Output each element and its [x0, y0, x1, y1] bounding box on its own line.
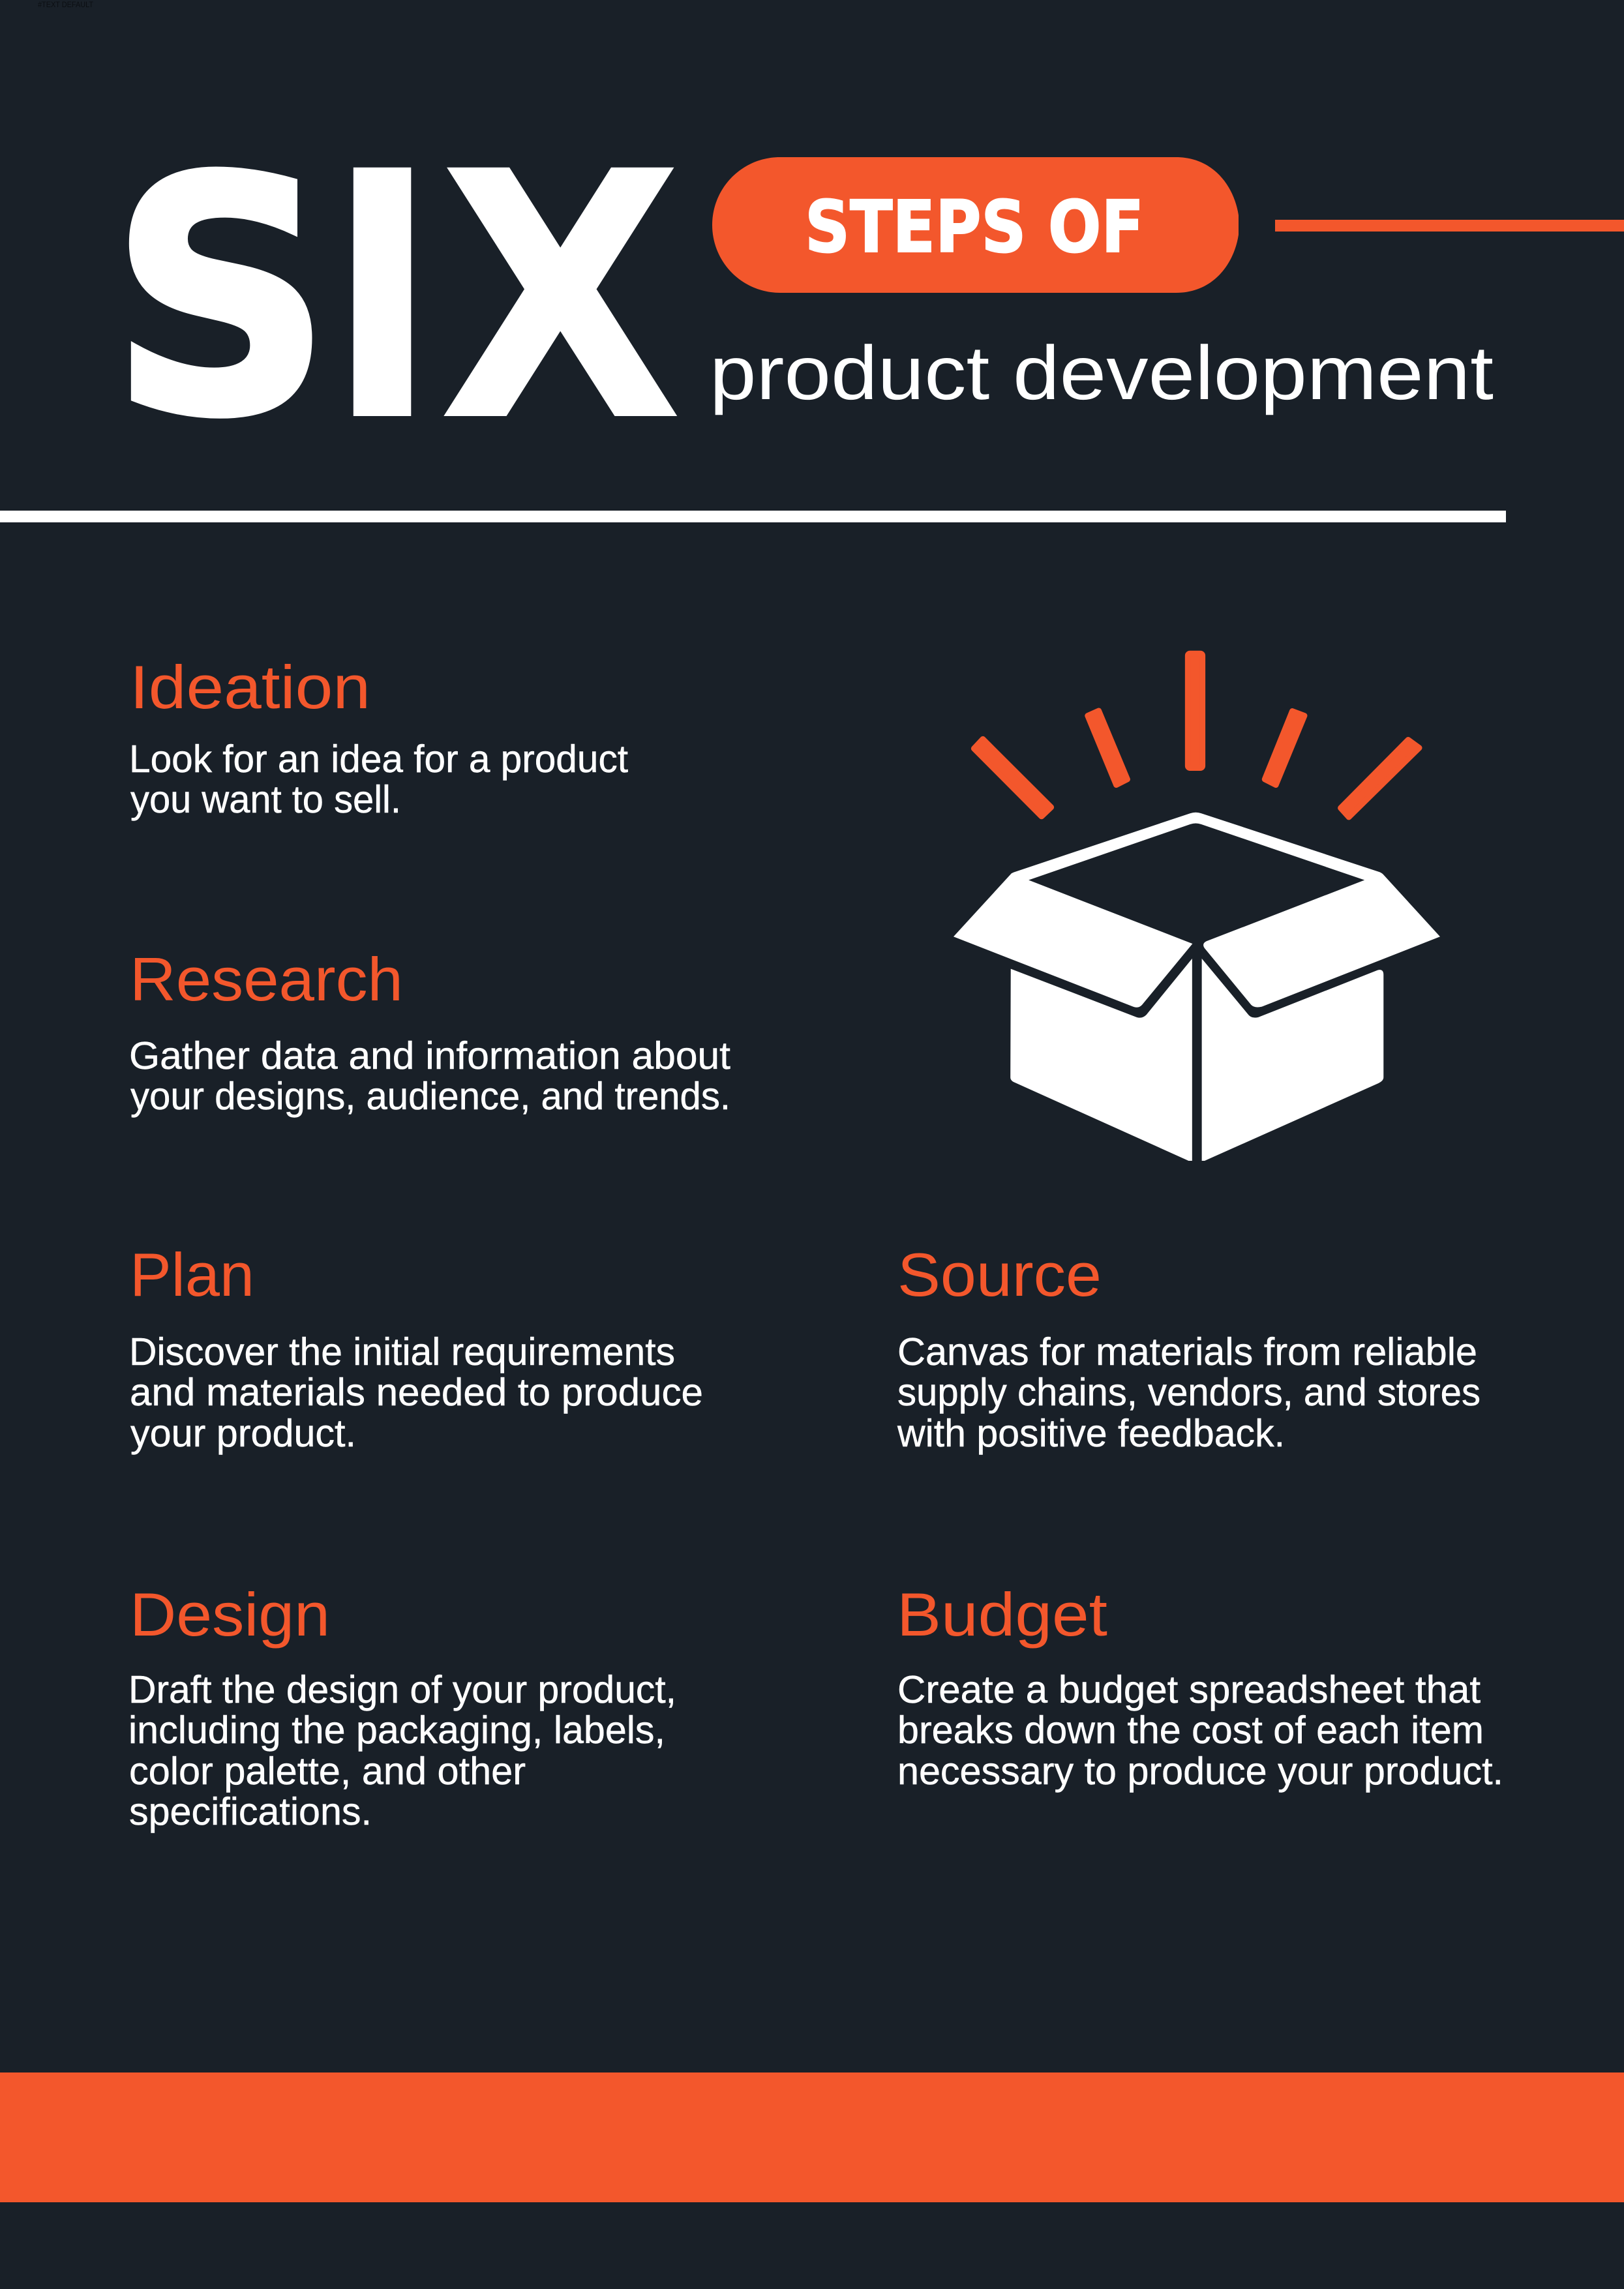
step: Design: Design	[130, 1580, 330, 1649]
step: Ideation: Look for an idea for a product	[129, 738, 628, 781]
orange accent line	[1275, 220, 1624, 232]
step: Source: Canvas for materials from reliable	[897, 1330, 1477, 1373]
footer band	[0, 2072, 1624, 2202]
step: Ideation: you want to sell.	[130, 778, 401, 821]
icon: orange rays	[974, 653, 1419, 817]
step: Source: supply chains, vendors, and stores	[897, 1371, 1481, 1414]
title: SIX	[110, 100, 684, 497]
icon: open box with rays	[954, 653, 1440, 1161]
step: Plan: Plan	[130, 1240, 254, 1309]
step: Research	[129, 945, 730, 1118]
subtitle: product development: product development	[710, 330, 1494, 415]
step: Design: specifications.	[129, 1790, 372, 1833]
icon: box right face	[1202, 959, 1383, 1161]
title: SIX: X	[438, 100, 684, 497]
step: Research: Gather data and information about	[129, 1034, 730, 1077]
pill: steps of: STEPS OF	[805, 185, 1144, 269]
step: Budget: breaks down the cost of each item	[897, 1709, 1484, 1752]
step: Plan: your product.	[130, 1412, 356, 1455]
step: Design	[128, 1580, 676, 1833]
step: Plan: and materials needed to produce	[130, 1371, 703, 1414]
step: Source: Source	[897, 1240, 1102, 1309]
icon: box left face	[1010, 959, 1192, 1161]
step: Budget: Create a budget spreadsheet that	[897, 1668, 1481, 1711]
step: Plan	[129, 1240, 703, 1455]
pill: steps of	[712, 157, 1239, 293]
step: Source: with positive feedback.	[897, 1412, 1285, 1455]
step: Budget: necessary to produce your product.	[897, 1750, 1503, 1793]
title: SIX: I	[325, 100, 440, 497]
step: Research: Research	[130, 945, 403, 1013]
step: Design: including the packaging, labels,	[128, 1709, 665, 1752]
step: Source	[897, 1240, 1481, 1455]
step: Ideation	[129, 653, 628, 821]
step: Budget	[897, 1580, 1503, 1793]
step: Budget: Budget	[897, 1580, 1107, 1649]
icon: box lid flaps	[954, 813, 1440, 1008]
step: Plan: Discover the initial requirements	[129, 1330, 675, 1373]
title: SIX: S	[110, 111, 331, 488]
step: Ideation: Ideation	[130, 653, 370, 721]
step: Research: your designs, audience, and trends.	[130, 1075, 730, 1118]
template placeholder label: #TEXT DEFAULT	[38, 0, 94, 9]
step: Design: color palette, and other	[129, 1750, 526, 1793]
step: Design: Draft the design of your product,	[128, 1668, 676, 1711]
white divider	[0, 511, 1506, 522]
